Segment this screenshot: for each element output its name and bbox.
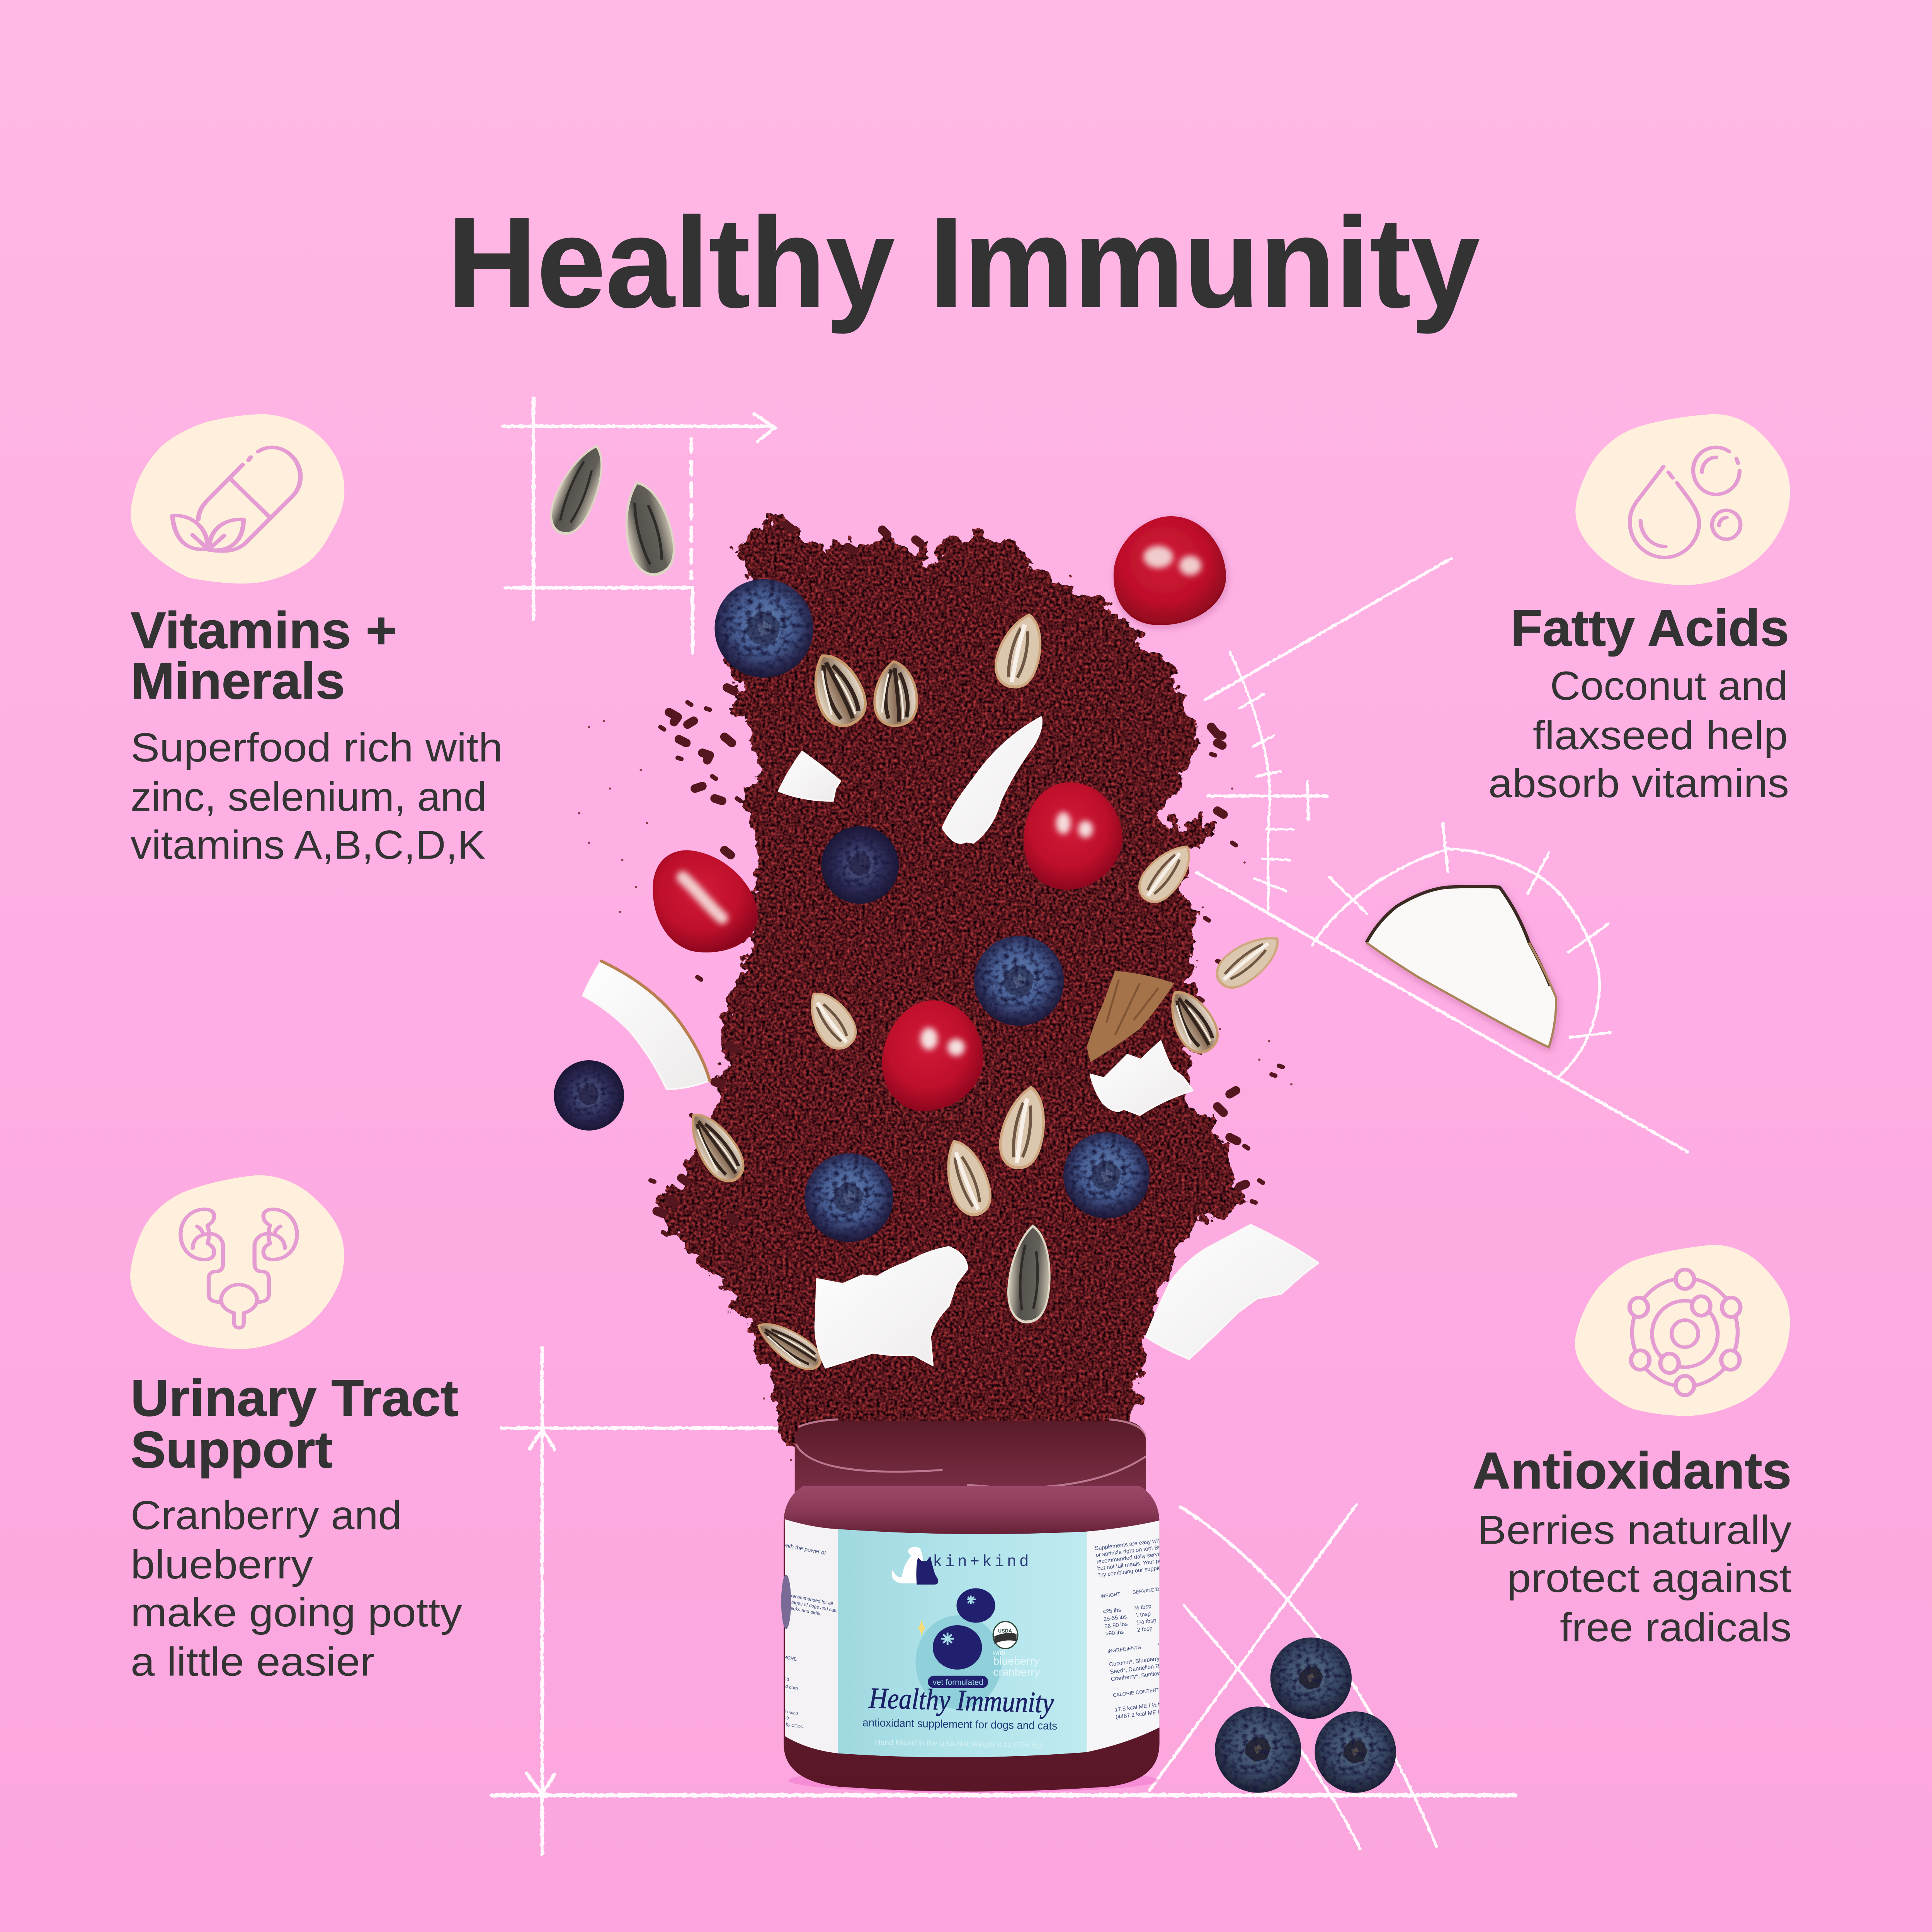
ingredients scattered over powder xyxy=(544,439,1556,1793)
body text xyxy=(1488,663,1789,806)
panel: antioxidants xyxy=(1473,1245,1792,1650)
label: right panel copy: WEIGHT xyxy=(1100,1591,1121,1599)
label: left panel copy: life stages of dogs and cats xyxy=(781,1597,838,1614)
body text: Cranberry and xyxy=(131,1493,402,1538)
powder fine specks xyxy=(579,721,1291,1460)
label: right panel copy: Supplements are easy when they're mixed xyxy=(1095,1532,1201,1552)
chalk blueprint sketch lines xyxy=(492,398,1688,1854)
jar body xyxy=(784,1486,1160,1791)
sketch: half circle around coconut xyxy=(1312,823,1611,1077)
sketch: jar height dimension xyxy=(492,1348,1515,1854)
label: vet formulated badge: vet formulated xyxy=(933,1678,983,1687)
coconut: long shard xyxy=(942,717,1042,843)
heading: Urinary Tract xyxy=(131,1369,458,1427)
label: right panel copy: 2 tbsp xyxy=(1137,1626,1153,1633)
label: right panel copy: Coconut*, Blueberry*, Flax xyxy=(1109,1654,1176,1668)
body text xyxy=(1477,1508,1792,1650)
label: product name: Healthy Immunity xyxy=(868,1682,1054,1719)
body text: flaxseed help xyxy=(1533,713,1788,758)
label: small print xyxy=(785,1539,1160,1728)
coconut: right chunk xyxy=(1146,1225,1318,1359)
label: left panel copy: @kinandkind xyxy=(762,1672,790,1682)
label: right panel copy: 25-55 lbs xyxy=(1103,1614,1127,1622)
body text: protect against xyxy=(1507,1556,1791,1601)
body text xyxy=(131,1493,462,1685)
label: vet formulated badge xyxy=(928,1676,988,1688)
label: right panel copy: but not full meals. Your pet still needs xyxy=(1097,1554,1190,1572)
label: right panel copy: CALORIE CONTENT (CALCULATED) xyxy=(1112,1682,1196,1698)
sketch: top-left seed frame xyxy=(503,398,775,653)
label: flavour text: blueberry xyxy=(993,1655,1039,1667)
coconut: small wedge xyxy=(779,752,840,801)
label: yellow sparkle xyxy=(918,1619,925,1636)
panel: vitamins and minerals xyxy=(131,414,503,868)
label: left panel copy: Distributed by kin+kind xyxy=(756,1704,798,1716)
coconut: large chunk near jar xyxy=(815,1247,967,1368)
heading: Antioxidants xyxy=(1473,1442,1791,1500)
blueberries on powder xyxy=(554,579,1150,1242)
label: USDA organic seal xyxy=(993,1621,1018,1649)
label: right panel copy: Try combining our supplements for more xyxy=(1098,1560,1199,1579)
title: Healthy Immunity xyxy=(447,191,1481,335)
heading: Vitamins + xyxy=(131,602,397,659)
jar of Healthy Immunity xyxy=(750,1419,1225,1793)
heading: Fatty Acids xyxy=(1510,599,1789,657)
label: left panel copy: 8+ weeks and older. xyxy=(780,1604,822,1617)
blueberries trio xyxy=(1215,1638,1396,1793)
panel: urinary tract support xyxy=(130,1175,462,1685)
coconut: brown husk chunk xyxy=(1087,971,1174,1062)
label: right panel copy: >90 lbs xyxy=(1105,1629,1124,1637)
coconut: white chunk xyxy=(1090,1041,1193,1115)
body text: blueberry xyxy=(131,1542,313,1587)
label: right panel copy: INGREDIENTS xyxy=(1107,1644,1141,1654)
label: right panel copy: or sprinkle right on top! But hey, go slow xyxy=(1095,1540,1196,1558)
label: right panel copy: 1 tbsp xyxy=(1135,1611,1151,1619)
sketch: right angle and arc xyxy=(1196,558,1688,1152)
body text: make going potty xyxy=(131,1590,462,1635)
label: left panel copy xyxy=(750,1542,849,1732)
icon: oil drop and bubbles xyxy=(1575,414,1790,585)
label: flavour text: cranberry xyxy=(993,1666,1040,1679)
label: right panel copy: (4487.2 kcal ME / kg) xyxy=(1115,1708,1169,1721)
label: left panel copy: with the power of xyxy=(783,1542,827,1556)
label: USDA organic seal: USDA xyxy=(998,1628,1012,1634)
jar neck highlights xyxy=(796,1419,1146,1488)
powder pile xyxy=(579,515,1291,1460)
icon: kidneys and bladder xyxy=(130,1175,344,1349)
label: right panel copy: 1½ tbsp xyxy=(1136,1617,1156,1626)
label: left panel purple oval xyxy=(781,1575,791,1629)
label: left panel copy: www.kin-kind.com xyxy=(760,1679,798,1691)
coconut pieces xyxy=(583,717,1318,1368)
body text: vitamins A,B,C,D,K xyxy=(131,823,485,868)
heading: Support xyxy=(131,1421,333,1479)
label: right panel copy: ½ tbsp xyxy=(1134,1603,1152,1611)
label: left panel copy: Vet recommended for all xyxy=(782,1591,833,1606)
label: left panel copy: Roselle, NJ 07203 xyxy=(755,1710,789,1721)
label: brand logo dog and cat xyxy=(892,1547,938,1585)
powder crumbs xyxy=(651,525,1283,1395)
label: flavour text xyxy=(993,1650,1040,1679)
label: pale circle xyxy=(915,1615,1002,1709)
jar shadow glow xyxy=(789,1768,1158,1793)
coconut: half shell xyxy=(1366,886,1556,1047)
cranberry: left xyxy=(653,850,758,952)
label: right panel copy: recommended daily serving. And remember xyxy=(1096,1546,1206,1565)
label: blueberry illustration bottom xyxy=(933,1625,982,1670)
cranberry: centre xyxy=(882,1000,983,1111)
coconut: curved left slice xyxy=(583,961,710,1089)
icon: molecule xyxy=(1575,1245,1790,1416)
cranberry: top right xyxy=(1114,516,1226,625)
label: right panel copy: SERVING/DAY* xyxy=(1132,1585,1168,1595)
jar neck xyxy=(795,1421,1146,1496)
body text: Superfood rich with xyxy=(131,725,503,770)
label: right white panel xyxy=(1087,1520,1160,1752)
body text: Berries naturally xyxy=(1477,1508,1792,1553)
label: product description: antioxidant supplement for dogs and cats xyxy=(862,1716,1057,1732)
heading: Minerals xyxy=(131,652,345,710)
heading xyxy=(131,602,397,710)
panel: fatty acids xyxy=(1488,414,1790,806)
sketch: crossing lines behind blueberries xyxy=(1150,1504,1437,1849)
body text xyxy=(131,725,503,868)
label: right panel copy: 56-90 lbs xyxy=(1104,1621,1128,1630)
sunflower seeds on powder xyxy=(679,610,1287,1376)
label: blueberry illustration top xyxy=(956,1588,995,1623)
label: net weight line: Hand Mixed in the USA Net Weight 8 oz (226.8g) xyxy=(875,1738,1043,1750)
body text: free radicals xyxy=(1560,1605,1791,1650)
label: right panel copy: <25 lbs xyxy=(1102,1607,1121,1615)
label: right panel copy: *Organic xyxy=(1157,1640,1177,1648)
body text: zinc, selenium, and xyxy=(131,774,487,820)
label: right panel copy: Seed*, Dandelion Root*, xyxy=(1110,1662,1172,1675)
heading xyxy=(131,1369,458,1479)
body text: absorb vitamins xyxy=(1488,761,1789,806)
label: blue front panel xyxy=(838,1529,1087,1757)
powder mass xyxy=(658,515,1245,1442)
label: left white panel xyxy=(785,1519,838,1753)
label: flavour text: with xyxy=(993,1650,1005,1656)
label: right panel copy: Cranberry*, Sunflower Seed* xyxy=(1111,1668,1184,1683)
body text: Coconut and xyxy=(1550,663,1788,709)
icon: pill with leaves xyxy=(131,414,344,583)
seeds: dark pair at top-left xyxy=(544,439,680,579)
label: left panel copy: Certified Organic by CCOF xyxy=(753,1716,804,1730)
cranberry: centre right xyxy=(1024,782,1122,890)
label: right panel copy xyxy=(1095,1532,1225,1721)
coconut: curved slice skin xyxy=(601,961,710,1081)
label: right panel copy: 17.5 kcal ME / ½ tbsp xyxy=(1114,1701,1169,1713)
label: left panel copy: LEARN MORE xyxy=(766,1651,798,1662)
label: brand name: kin+kind xyxy=(933,1553,1029,1571)
body text: a little easier xyxy=(131,1639,374,1685)
